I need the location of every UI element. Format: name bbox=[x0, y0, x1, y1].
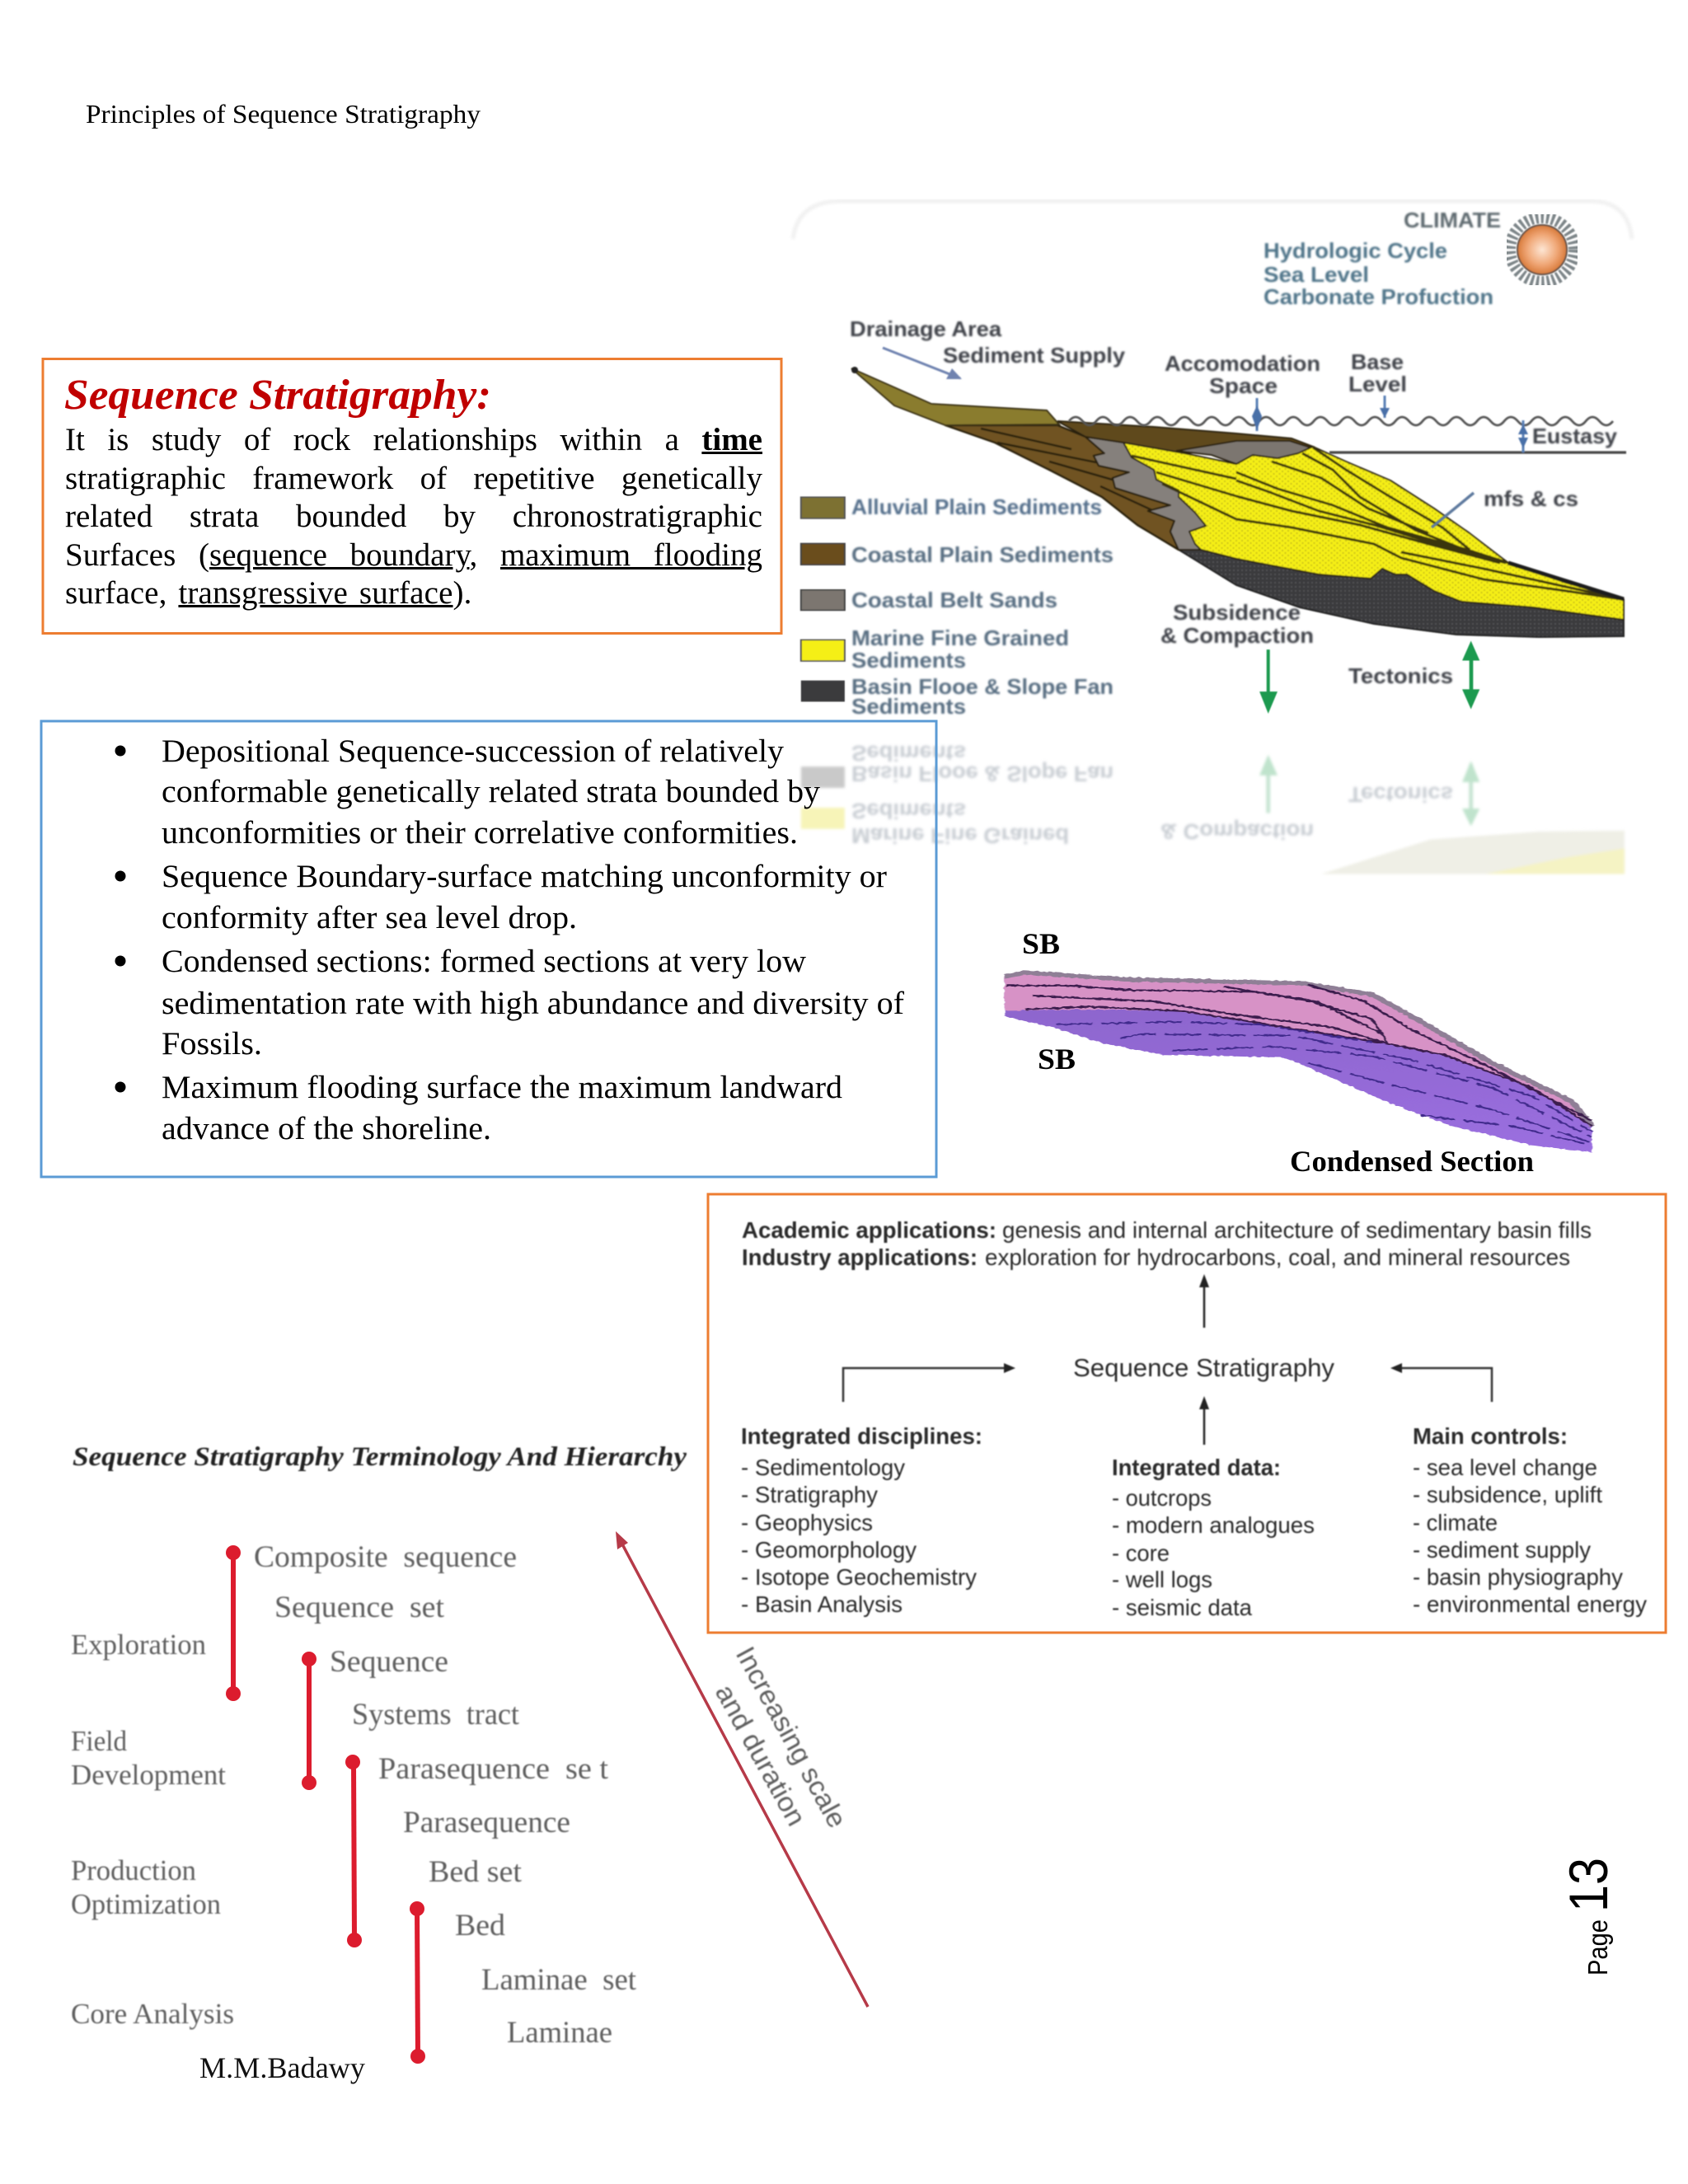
panel: key terms bullet list bbox=[41, 721, 936, 1177]
integrated disciplines column: - Sedimentology bbox=[741, 1455, 905, 1480]
hierarchy terms: Systems tract bbox=[352, 1698, 520, 1732]
marine fine grained yellow unit bbox=[1123, 443, 1624, 620]
applications text: Industry applications: bbox=[742, 1244, 978, 1270]
diagram labels: Marine Fine Grained bbox=[851, 626, 1069, 650]
wedge of sedimentary layers bbox=[851, 367, 1624, 637]
diagram labels: Carbonate Profuction bbox=[1264, 284, 1493, 309]
application level labels: Field bbox=[71, 1725, 127, 1757]
main controls column: - environmental energy bbox=[1413, 1591, 1647, 1617]
green subsidence and tectonics arrows bbox=[1259, 640, 1479, 714]
integrated disciplines column: - Geophysics bbox=[741, 1510, 873, 1535]
integrated disciplines column: - Geomorphology bbox=[741, 1537, 917, 1563]
eustasy sea level wave and arrows bbox=[883, 348, 1626, 527]
application level labels: Exploration bbox=[71, 1629, 206, 1661]
bullet text bbox=[162, 733, 904, 1146]
diagram labels: Sediments bbox=[851, 648, 966, 673]
diagram labels: CLIMATE bbox=[1404, 208, 1501, 232]
bullet text: conformable genetically related strata bounded by bbox=[162, 774, 821, 809]
diagram labels: Basin Flooe & Slope Fan bbox=[851, 674, 1114, 699]
page number: 13 bbox=[1558, 1858, 1619, 1912]
main controls column: - basin physiography bbox=[1413, 1564, 1623, 1590]
hierarchy terms: Laminae set bbox=[481, 1963, 637, 1997]
central label: Sequence Stratigraphy bbox=[1073, 1353, 1335, 1382]
diagram labels: Coastal Belt Sands bbox=[851, 588, 1057, 612]
application level labels: Core Analysis bbox=[71, 1998, 234, 2030]
page header: Principles of Sequence Stratigraphy bbox=[86, 99, 481, 129]
definition body text: related strata bounded by chronostratigraphic bbox=[65, 499, 762, 534]
hierarchy title: Sequence Stratigraphy Terminology And Hierarchy bbox=[73, 1442, 687, 1472]
integrated disciplines column: - Stratigraphy bbox=[741, 1482, 878, 1507]
diagram labels: Level bbox=[1348, 372, 1407, 396]
label: lower SB: SB bbox=[1038, 1043, 1076, 1076]
diagram labels: Subsidence bbox=[1173, 600, 1301, 625]
bullet text: advance of the shoreline. bbox=[162, 1111, 491, 1146]
coastal belt cap bbox=[1176, 441, 1311, 464]
integrated disciplines column: - Basin Analysis bbox=[741, 1591, 903, 1617]
bullet box border bbox=[41, 721, 936, 1177]
bullet text: conformity after sea level drop. bbox=[162, 900, 577, 935]
bullet text: unconformities or their correlative conformities. bbox=[162, 815, 798, 851]
legend swatches bbox=[801, 497, 845, 701]
application level labels: Optimization bbox=[71, 1888, 221, 1920]
hierarchy terms: Bed bbox=[455, 1909, 506, 1943]
bedding surfaces in yellow unit bbox=[1132, 448, 1621, 599]
label: upper SB: SB bbox=[1022, 927, 1060, 960]
bullet text: Condensed sections: formed sections at very low bbox=[162, 944, 806, 979]
diagram labels: Accomodation bbox=[1165, 351, 1320, 376]
diagram: depositional sequence cross section bbox=[793, 201, 1632, 874]
main controls column: Main controls: bbox=[1413, 1423, 1568, 1449]
page number: Page bbox=[1582, 1919, 1613, 1975]
diagram labels: Coastal Plain Sediments bbox=[851, 542, 1114, 567]
applications text bbox=[742, 1217, 1592, 1270]
application level labels bbox=[71, 1629, 234, 2030]
diagram labels: Alluvial Plain Sediments bbox=[851, 494, 1102, 519]
integrated data column: - seismic data bbox=[1112, 1595, 1252, 1620]
faint mirrored reflection below the diagram: & Compaction bbox=[1160, 819, 1314, 844]
bullet text: Depositional Sequence-succession of relatively bbox=[162, 733, 785, 769]
coastal belt sands unit bbox=[1085, 437, 1206, 550]
applications text: genesis and internal architecture of sedimentary basin fills bbox=[1002, 1217, 1592, 1243]
diagram labels: Sediments bbox=[851, 694, 966, 719]
diagram labels: Eustasy bbox=[1532, 424, 1618, 448]
arrows bbox=[843, 1274, 1492, 1445]
main controls column: - climate bbox=[1413, 1510, 1498, 1535]
integrated data column: - modern analogues bbox=[1112, 1512, 1315, 1538]
applications text: exploration for hydrocarbons, coal, and mineral resources bbox=[985, 1244, 1570, 1270]
panel background of cross section image bbox=[793, 201, 1632, 239]
hierarchy terms: Parasequence bbox=[403, 1806, 570, 1840]
integrated data column: - core bbox=[1112, 1540, 1170, 1566]
hierarchy terms: Laminae bbox=[507, 2016, 612, 2050]
red range bars bbox=[226, 1545, 425, 2064]
diagram labels: Sediment Supply bbox=[943, 343, 1126, 368]
integrated data column: - well logs bbox=[1112, 1567, 1212, 1592]
faint mirrored reflection below the diagram: Marine Fine Grained bbox=[851, 823, 1069, 848]
definition title: Sequence Stratigraphy: bbox=[64, 372, 491, 419]
integrated disciplines column: - Isotope Geochemistry bbox=[741, 1564, 977, 1590]
bullet text: Sequence Boundary-surface matching unconformity or bbox=[162, 859, 887, 894]
diagram labels: mfs & cs bbox=[1484, 486, 1578, 511]
definition body text: Surfaces (sequence boundary, maximum flooding bbox=[65, 537, 762, 573]
climate sun icon bbox=[1510, 218, 1574, 282]
main controls column: - sea level change bbox=[1413, 1455, 1597, 1480]
diagram labels: Space bbox=[1209, 373, 1278, 398]
coastal plain unit bbox=[945, 425, 1179, 550]
page number bbox=[1558, 1858, 1619, 1975]
integrated disciplines column: Integrated disciplines: bbox=[741, 1423, 982, 1449]
hierarchy terms: Sequence bbox=[330, 1645, 448, 1679]
faint mirrored reflection below the diagram: Tectonics bbox=[1348, 782, 1453, 807]
definition body text: surface, transgressive surface). bbox=[65, 575, 472, 611]
diagram: condensed section wedge bbox=[1005, 927, 1592, 1178]
diagram labels: & Compaction bbox=[1160, 623, 1314, 648]
hierarchy terms bbox=[254, 1540, 637, 2050]
hierarchy terms: Parasequence se t bbox=[378, 1752, 609, 1786]
rotated scale label: and duration bbox=[710, 1679, 812, 1831]
upper coastal plain band bbox=[1057, 421, 1313, 453]
bullet text: Maximum flooding surface the maximum landward bbox=[162, 1070, 843, 1105]
faint mirrored reflection below the diagram bbox=[801, 741, 1625, 874]
dark basin floor unit bbox=[1179, 550, 1624, 637]
main controls column: - subsidence, uplift bbox=[1413, 1482, 1602, 1507]
bullet text: sedimentation rate with high abundance and diversity of bbox=[162, 986, 904, 1021]
label: condensed section: Condensed Section bbox=[1290, 1145, 1534, 1178]
diagram labels: Drainage Area bbox=[850, 316, 1002, 341]
applications text: Academic applications: bbox=[742, 1217, 996, 1243]
integrated data column bbox=[1112, 1455, 1315, 1620]
definition body text bbox=[65, 422, 762, 611]
diagram labels: Hydrologic Cycle bbox=[1264, 238, 1447, 263]
diagram labels: Sea Level bbox=[1264, 262, 1369, 287]
diagram labels: Base bbox=[1351, 349, 1404, 374]
integrated data column: Integrated data: bbox=[1112, 1455, 1281, 1480]
application level labels: Development bbox=[71, 1759, 226, 1791]
main controls column: - sediment supply bbox=[1413, 1537, 1591, 1563]
chart: terminology and hierarchy bbox=[71, 1442, 868, 2064]
diagram labels: Tectonics bbox=[1348, 663, 1453, 688]
panel: sequence stratigraphy definition box bbox=[43, 359, 781, 633]
application level labels: Production bbox=[71, 1854, 196, 1886]
definition box border bbox=[43, 359, 781, 633]
bullet text: Fossils. bbox=[162, 1026, 262, 1062]
flow chart border bbox=[708, 1194, 1666, 1633]
alluvial plain unit bbox=[851, 368, 1059, 425]
diagram labels bbox=[850, 208, 1618, 719]
author credit: M.M.Badawy bbox=[199, 2051, 365, 2084]
faint mirrored reflection below the diagram: Basin Flooe & Slope Fan bbox=[851, 762, 1114, 786]
definition body text: It is study of rock relationships within a time bbox=[65, 422, 762, 457]
purple and pink strata wedge bbox=[1005, 972, 1592, 1152]
bullet dots bbox=[115, 745, 125, 1093]
faint mirrored reflection below the diagram: Sediments bbox=[851, 741, 966, 766]
hierarchy terms: Composite sequence bbox=[254, 1540, 517, 1574]
main controls column bbox=[1413, 1423, 1647, 1617]
hierarchy terms: Sequence set bbox=[274, 1591, 445, 1624]
integrated data column: - outcrops bbox=[1112, 1485, 1212, 1511]
panel: applications and controls flow chart bbox=[708, 1194, 1666, 1633]
definition body text: stratigraphic framework of repetitive genetically bbox=[65, 461, 762, 496]
rotated scale label: Increasing scale bbox=[730, 1642, 853, 1833]
faint mirrored reflection below the diagram: Sediments bbox=[851, 799, 966, 823]
integrated disciplines column bbox=[741, 1423, 982, 1617]
scale arrow bbox=[616, 1531, 868, 2007]
hierarchy terms: Bed set bbox=[429, 1855, 523, 1889]
